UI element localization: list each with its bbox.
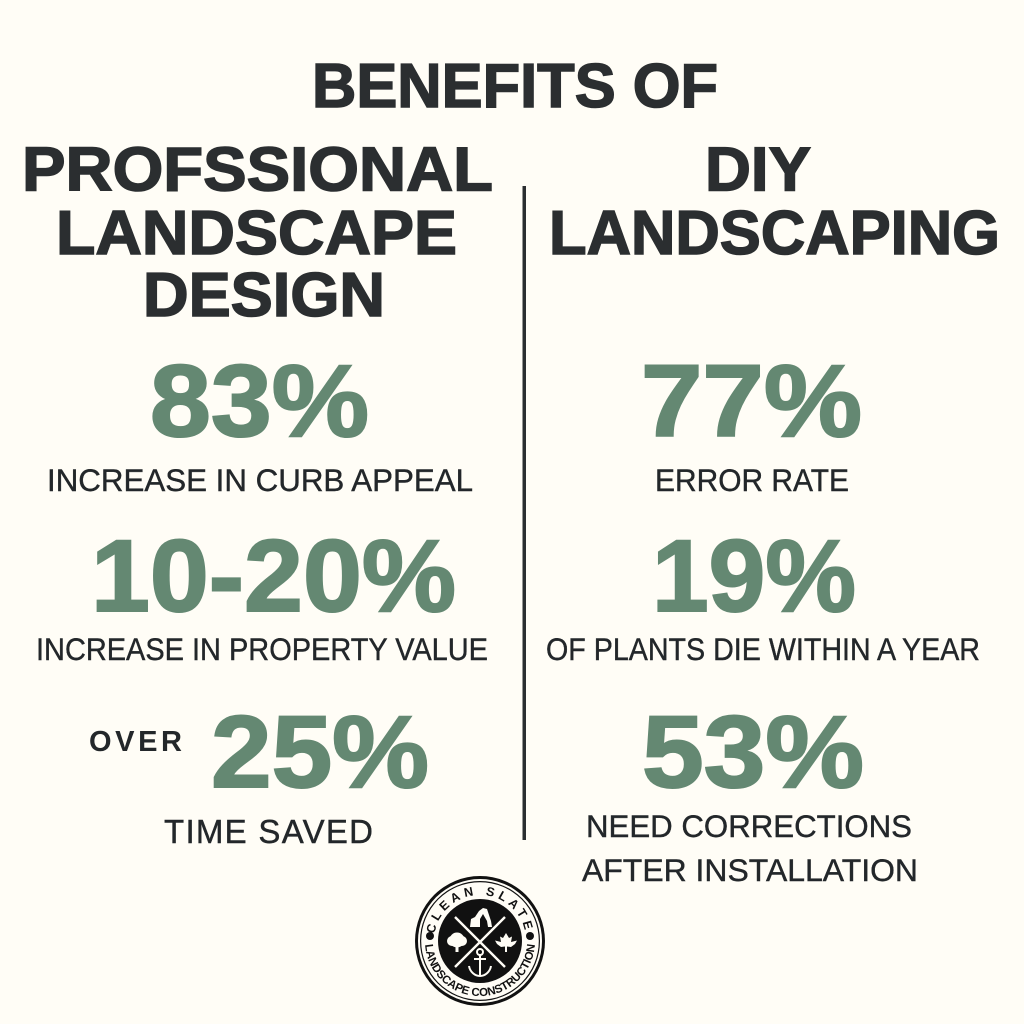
- heading: professional landscape design: [22, 136, 493, 330]
- stat: 10-20 percent: INCREASE IN PROPERTY VALUE: [36, 631, 488, 667]
- stat: 83 percent: [47, 344, 473, 498]
- stat: 83 percent: INCREASE IN CURB APPEAL: [47, 462, 473, 498]
- icon: anchor: [469, 949, 491, 976]
- heading: DIY landscaping: DIY: [705, 136, 811, 204]
- panel: professional stats: [36, 344, 488, 850]
- stat: 53 percent: NEED CORRECTIONS: [586, 808, 912, 844]
- stat: over 25 percent: 25%: [211, 695, 429, 809]
- stat: over 25 percent: OVER: [89, 726, 182, 758]
- center divider: [522, 186, 526, 840]
- logo: Clean Slate Landscape Construction badge: [415, 876, 545, 1006]
- stat: 77 percent: 77%: [641, 344, 862, 458]
- stat: 77 percent: [641, 344, 862, 498]
- heading: DIY landscaping: [549, 136, 1000, 268]
- title: BENEFITS OF: [312, 52, 718, 121]
- logo side dots: [426, 932, 534, 940]
- heading: professional landscape design: LANDSCAPE: [56, 199, 457, 268]
- heading: professional landscape design: DESIGN: [143, 261, 385, 330]
- icon: tree: [447, 932, 467, 952]
- heading: professional landscape design: PROFSSIONAL: [22, 136, 493, 204]
- stat: over 25 percent: [89, 695, 429, 850]
- stat: 53 percent: AFTER INSTALLATION: [582, 852, 918, 888]
- icon: excavator: [470, 908, 492, 927]
- heading: DIY landscaping: LANDSCAPING: [549, 199, 1000, 268]
- stat: 19 percent: [546, 519, 980, 667]
- stat: 19 percent: 19%: [652, 519, 856, 633]
- stat: 10-20 percent: [36, 519, 488, 667]
- stat: over 25 percent: TIME SAVED: [164, 813, 373, 850]
- stat: 77 percent: ERROR RATE: [655, 462, 849, 498]
- icon: maple leaf: [495, 933, 517, 952]
- stat: 10-20 percent: 10-20%: [91, 519, 456, 633]
- logo top text: CLEAN SLATE: [426, 887, 533, 932]
- logo crossed lines: [455, 917, 505, 967]
- stat: 53 percent: [582, 695, 918, 888]
- stat: 53 percent: 53%: [642, 695, 864, 809]
- stat: 83 percent: 83%: [150, 344, 369, 458]
- logo bottom text: LANDSCAPE CONSTRUCTION: [425, 944, 535, 996]
- panel: DIY stats: [546, 344, 980, 888]
- stat: 19 percent: OF PLANTS DIE WITHIN A YEAR: [546, 631, 980, 667]
